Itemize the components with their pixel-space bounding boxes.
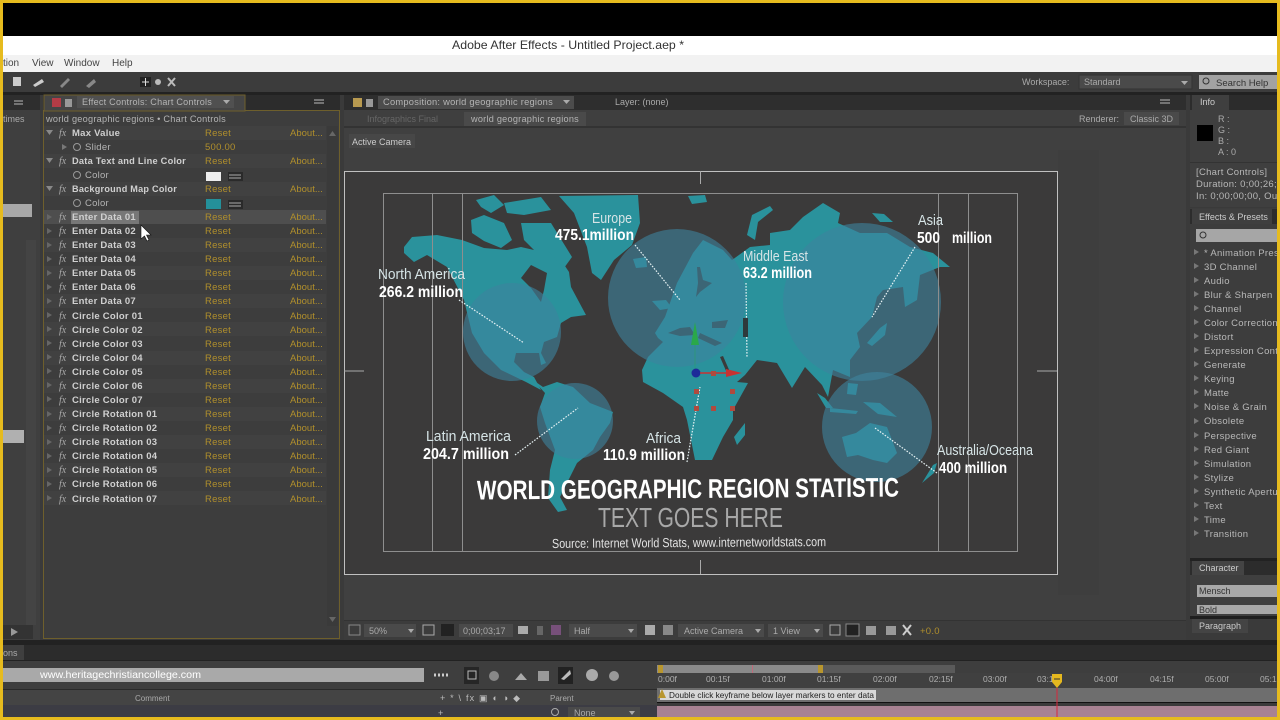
effects list: Reset [205,409,231,420]
tab: effect controls: Effect Controls: Chart Controls [82,97,212,108]
effects list: Reset [205,353,231,364]
effects list: Background Map Color [72,184,177,195]
row stripes [44,126,326,505]
effects list: Circle Rotation 05 [72,465,158,476]
time ruler: 02:15f [929,674,953,684]
effects list: fx [59,395,67,406]
effects tree: Matte [1204,388,1229,399]
effects list: Enter Data 06 [72,282,136,293]
effects list: Reset [205,339,231,350]
effects list: Reset [205,156,231,167]
circle: south america [537,383,613,459]
panel: info: In: 0;00;00;00, Out [1196,191,1280,202]
effects list: About... [290,465,323,476]
inland seas [668,267,730,373]
effects list: About... [290,395,323,406]
time ruler: 05:00f [1205,674,1229,684]
effects list: Circle Rotation 03 [72,437,157,448]
effects list: fx [59,282,67,293]
effects list: fx [59,212,67,223]
effects list: Enter Data 04 [72,254,136,265]
effects list: 500.00 [205,142,236,153]
layer column header: Parent [550,694,574,703]
effects list: About... [290,128,323,139]
layer column header: + * \ fx ▣ ◐ ◑ ◆ [440,693,521,703]
title bar [0,0,1280,56]
icon: mouse cursor [141,225,151,241]
viewer tabs: Classic 3D [1130,114,1174,124]
effects list: Reset [205,240,231,251]
label: north america: 266.2 million [379,284,463,301]
panel: info [1190,95,1280,207]
effects list: fx [59,353,67,364]
effects list: About... [290,451,323,462]
effects list: fx [59,451,67,462]
effects list: fx [59,423,67,434]
time ruler: 01:00f [762,674,786,684]
effects tree: Stylize [1204,473,1234,484]
label: north america [378,266,466,301]
playhead [1052,674,1062,717]
panel: left sliver [3,95,40,640]
time ruler [657,673,1280,688]
effects tree: Noise & Grain [1204,402,1267,413]
time ruler: 01:15f [817,674,841,684]
effects list [46,128,323,505]
viewer tabs: Infographics Final [367,114,438,124]
effects list: Reset [205,296,231,307]
effects list: About... [290,254,323,265]
label: asia: 500 [917,230,940,247]
effects tree: Color Correction [1204,318,1278,329]
label: middle east [743,248,812,282]
effects list: fx [59,128,67,139]
scrollbar [327,126,338,626]
effects list: About... [290,282,323,293]
effects list: Enter Data 05 [72,268,136,279]
label: europe: 475.1million [555,227,634,244]
effects list: Reset [205,479,231,490]
effects list: fx [59,437,67,448]
layer row: + [438,708,443,718]
effects tree: Generate [1204,360,1246,371]
layer bar [657,706,1277,717]
circle: north america [463,283,561,381]
effects list: Data Text and Line Color [72,156,186,167]
effects list: About... [290,226,323,237]
layer column header: Comment [135,694,170,703]
effects list: Reset [205,226,231,237]
effects list: Reset [205,268,231,279]
time ruler: 05:1 [1260,674,1277,684]
panel: timeline: ons [3,648,18,658]
effects list: Enter Data 02 [72,226,136,237]
effects list: fx [59,339,67,350]
effects list: Reset [205,128,231,139]
effects list: Reset [205,184,231,195]
panel: character: Mensch [1199,586,1231,596]
effects list: Circle Color 04 [72,353,143,364]
map: greenland [559,195,640,280]
label: australia: Australia/Oceana [937,442,1034,459]
effects list: About... [290,367,323,378]
circle: oceania [822,372,932,482]
effects tree: Obsolete [1204,416,1244,427]
subheading: TEXT GOES HERE [598,502,783,533]
effects list: fx [59,325,67,336]
effects tree [1194,248,1280,540]
effects tree: Perspective [1204,431,1257,442]
time ruler: 04:15f [1150,674,1174,684]
panel: composition viewer [344,95,1186,640]
panel: effects and presets [1190,208,1280,562]
effects list: Enter Data 07 [72,296,136,307]
circle: asia [783,223,941,381]
menu bar [0,55,1280,72]
effects list: fx [59,226,67,237]
panel: effect controls [43,95,340,638]
panel: info: B : [1218,136,1229,146]
panel: character: Bold [1199,605,1217,615]
layer row [0,705,657,718]
label: europe: Europe [592,210,632,227]
effects list: fx [59,479,67,490]
label: africa: Africa [646,430,682,447]
effects tree: Simulation [1204,459,1251,470]
effects tree: Blur & Sharpen [1204,290,1273,301]
time ruler: 04:00f [1094,674,1118,684]
effects list: Circle Color 05 [72,367,143,378]
effects list: Reset [205,494,231,505]
effects list: fx [59,240,67,251]
viewer tabs: world geographic regions [470,114,579,125]
effects tree: Text [1204,501,1223,512]
viewer tabs: Composition: world geographic regions [383,97,553,108]
effects list: Reset [205,212,231,223]
timeline navigator [657,665,955,673]
viewer footer [344,620,1186,640]
effects list: Max Value [72,128,120,139]
time ruler: 02:00f [873,674,897,684]
effects list: About... [290,479,323,490]
toolbar: Standard [1084,77,1121,87]
effects list: About... [290,212,323,223]
effects list: fx [59,409,67,420]
effects list: Circle Color 03 [72,339,143,350]
label: australia: 400 million [939,460,1007,477]
panel: info: R : [1218,114,1230,124]
effects list: Reset [205,437,231,448]
effects list: About... [290,156,323,167]
effects list: Reset [205,465,231,476]
panel: character [1190,558,1277,616]
time ruler: 03:1 [1037,674,1054,684]
comp frame [344,150,1099,595]
active camera label [349,134,415,148]
label: asia: Asia [918,212,944,229]
transform gizmo [691,318,748,411]
panel: info: Duration: 0;00;26;2 [1196,179,1280,190]
layer row: None [574,708,596,718]
panel: info: G : [1218,125,1230,135]
heading: WORLD GEOGRAPHIC REGION STATISTIC [477,473,899,505]
panel: paragraph [1190,616,1277,640]
time ruler: 0:00f [658,674,678,684]
label: australia [937,442,1034,477]
effects list: fx [59,184,67,195]
viewer footer: +0.0 [920,626,940,637]
effects list: Circle Rotation 06 [72,479,157,490]
hudson bay [521,265,547,302]
map: canadian arctic islands [471,195,572,268]
world map [404,195,950,512]
menu bar: View [32,58,54,69]
effects tree: Red Giant [1204,445,1250,456]
panel: info: [Chart Controls] [1196,167,1267,178]
effects list: Circle Rotation 01 [72,409,158,420]
effects list: About... [290,409,323,420]
effects list: Circle Color 07 [72,395,143,406]
effects list: fx [59,465,67,476]
panel: info: A : 0 [1218,147,1236,157]
viewer footer: 50% [369,626,387,636]
map: north america [404,235,586,390]
viewer tabs: Renderer: [1079,114,1119,124]
viewer footer: Active Camera [684,626,743,636]
toolbar: Search Help [1216,78,1268,89]
effects list: fx [59,268,67,279]
tab: effect controls [52,96,324,108]
panel: info: Info [1200,97,1215,107]
effects list: fx [59,494,67,505]
effects tree: 3D Channel [1204,262,1257,273]
viewer footer: Half [574,626,591,636]
menu bar: Help [112,58,133,69]
viewer tabs [353,96,1179,126]
effects list: About... [290,268,323,279]
effects list: Color [85,198,109,209]
menu bar: Window [64,58,100,69]
effects list: Circle Rotation 02 [72,423,157,434]
effects list: Circle Color 02 [72,325,143,336]
layer marker bar [657,688,1277,703]
effects list: About... [290,339,323,350]
source: Source: Internet World Stats, www.internetworldstats.com [552,534,826,551]
effects list: Reset [205,282,231,293]
effects list: Circle Rotation 07 [72,494,157,505]
label: africa [603,430,685,464]
effects tree: Keying [1204,374,1235,385]
timeline search field [3,668,424,682]
effects list: fx [59,367,67,378]
effects list: Circle Color 01 [72,311,143,322]
map: south america [533,380,613,512]
label: africa: 110.9 million [603,447,685,464]
effects list: fx [59,381,67,392]
title bar: Adobe After Effects - Untitled Project.aep * [452,38,684,52]
effects list: Reset [205,395,231,406]
leader lines [459,245,937,473]
effects list: About... [290,325,323,336]
effects list: Reset [205,367,231,378]
timeline search field: www.heritagechristiancollege.com [39,670,201,681]
timeline switches [434,667,619,684]
toolbar [0,72,1280,95]
active camera label: Active Camera [352,137,411,147]
map: islands [633,195,937,483]
effects list: Reset [205,254,231,265]
effects list: About... [290,381,323,392]
label: latin america [423,428,512,463]
effects list: About... [290,240,323,251]
panel: paragraph: Paragraph [1199,621,1241,631]
label: north america: North America [378,266,466,283]
circle: europe [608,229,746,367]
effects list: fx [59,156,67,167]
effects tree: Audio [1204,276,1230,287]
label: asia [917,212,992,247]
map: eurasia and africa [642,203,950,460]
effects list: Circle Color 06 [72,381,143,392]
effects list: fx [59,254,67,265]
label: europe [555,210,634,244]
menu bar: tion [3,58,19,69]
label: latin america: Latin America [426,428,512,445]
breadcrumb: world geographic regions • Chart Controls [45,114,226,125]
effects list: Circle Rotation 04 [72,451,158,462]
effects tree: Time [1204,515,1226,526]
panel: effects and presets: Effects & Presets [1199,212,1268,222]
effects tree: Channel [1204,304,1242,315]
effects list: Reset [205,423,231,434]
effects tree: Distort [1204,332,1234,343]
effects tree: Transition [1204,529,1248,540]
effects list: Slider [85,142,111,153]
effects list: Reset [205,451,231,462]
viewer tabs: Layer: (none) [615,97,669,107]
effects list: Reset [205,311,231,322]
effects list: About... [290,423,323,434]
viewer footer: 1 View [773,626,800,636]
panel: character: Character [1199,563,1239,573]
viewer footer: 0;00;03;17 [463,626,506,636]
label: middle east: 63.2 million [743,265,812,282]
effects list: fx [59,311,67,322]
label: latin america: 204.7 million [423,446,509,463]
effects list: About... [290,353,323,364]
toolbar: Workspace: [1022,77,1069,87]
time ruler: 03:00f [983,674,1007,684]
effects list: Enter Data 03 [72,240,136,251]
layer column header [0,689,657,705]
effects list: About... [290,184,323,195]
effects list: fx [59,296,67,307]
effects list: About... [290,494,323,505]
panel: left sliver: times [3,114,25,124]
inner title-safe guides [344,171,1057,574]
label: middle east: Middle East [743,248,809,265]
label: asia: million [952,230,992,247]
effects list: Enter Data 01 [72,212,136,223]
effects list: About... [290,296,323,307]
effects list: About... [290,437,323,448]
effects list: About... [290,311,323,322]
panel: timeline [0,640,1280,718]
effects list: Color [85,170,109,181]
layer marker bar: Double click keyframe below layer markers to enter data [669,690,874,700]
effects list: Reset [205,381,231,392]
time ruler: 00:15f [706,674,730,684]
effects list: Reset [205,325,231,336]
